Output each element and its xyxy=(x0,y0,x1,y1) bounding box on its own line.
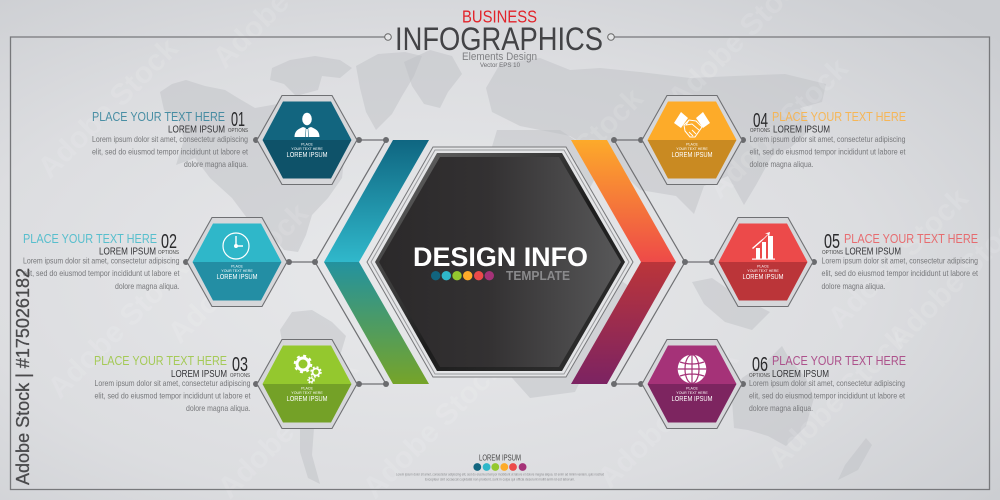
hexagon 03: LOREM IPSUM xyxy=(286,396,328,403)
text block 06 xyxy=(749,353,906,413)
text block 03: 03 xyxy=(232,354,248,376)
text block 05: 05 xyxy=(824,231,840,253)
title: vector note: Vector EPS 10 xyxy=(480,63,521,69)
title: infographics: INFOGRAPHICS xyxy=(395,21,603,57)
text block 02: Lorem ipsum dolor sit amet, consectetur adipiscing xyxy=(23,256,180,266)
text block 06: OPTIONS xyxy=(749,373,771,379)
central subheading: TEMPLATE xyxy=(506,269,570,283)
frame ornament: right ring xyxy=(608,34,614,40)
central heading: DESIGN INFO xyxy=(413,242,588,272)
text block 06: 06 xyxy=(752,354,768,376)
hexagon 02: LOREM IPSUM xyxy=(216,274,258,281)
text block 04: Lorem ipsum dolor sit amet, consectetur adipiscing xyxy=(750,135,906,144)
text block 03: dolore magna aliqua. xyxy=(186,404,250,413)
text block 04: LOREM IPSUM xyxy=(773,124,830,136)
text block 04: PLACE YOUR TEXT HERE xyxy=(772,109,906,124)
text block 01: PLACE YOUR TEXT HERE xyxy=(92,109,225,124)
text block 06: elit, sed do eiusmod tempor incididunt ut labore et xyxy=(749,392,906,400)
right chevron xyxy=(571,140,676,384)
text block 01 xyxy=(92,109,249,169)
text block 05: dolore magna aliqua. xyxy=(822,282,886,291)
footer text: Excepteur sint occaecat cupidatat non proident, sunt in culpa qui officia deserunt mollit anim id est laborum. xyxy=(425,478,575,482)
hexagon 03: PLACE xyxy=(301,386,313,390)
connector lines xyxy=(289,140,712,384)
text block 02: OPTIONS xyxy=(158,250,180,256)
hexagon 06 xyxy=(642,340,742,428)
text block 02: LOREM IPSUM xyxy=(99,246,156,258)
text block 04: elit, sed do eiusmod tempor incididunt ut labore et xyxy=(750,148,906,156)
text block 04 xyxy=(750,109,906,169)
text block 05: LOREM IPSUM xyxy=(845,246,901,258)
title: business: BUSINESS xyxy=(462,6,537,26)
icon: clock xyxy=(223,233,249,259)
connector dots xyxy=(183,137,817,387)
text block 02: PLACE YOUR TEXT HERE xyxy=(23,231,157,246)
text block 03: Lorem ipsum dolor sit amet, consectetur adipiscing xyxy=(94,379,251,388)
text block 02: elit, sed do eiusmod tempor incididunt ut labore et xyxy=(23,269,180,278)
text block 04: 04 xyxy=(753,110,768,132)
icon: globe xyxy=(678,355,706,383)
hexagon 01 xyxy=(257,96,357,184)
title xyxy=(395,6,603,69)
icon: bar chart xyxy=(752,232,775,260)
text block 04: dolore magna aliqua. xyxy=(750,160,814,169)
text block 06: PLACE YOUR TEXT HERE xyxy=(772,353,906,368)
watermarks: Adobe Stock xyxy=(32,32,185,185)
central colour dots xyxy=(431,271,494,280)
hexagon 02: YOUR TEXT HERE xyxy=(221,269,253,273)
footer xyxy=(396,454,604,482)
watermarks: Adobe Stock xyxy=(377,152,530,305)
hexagon 06: LOREM IPSUM xyxy=(672,396,713,403)
text block 06: Lorem ipsum dolor sit amet, consectetur adipiscing xyxy=(749,379,905,388)
text block 03: LOREM IPSUM xyxy=(171,369,227,380)
hexagon 03 xyxy=(257,340,357,428)
watermarks: Adobe Stock xyxy=(702,52,855,205)
hexagon 05: PLACE xyxy=(757,264,769,268)
text block 03: PLACE YOUR TEXT HERE xyxy=(94,353,227,368)
hexagon 04: PLACE xyxy=(686,142,698,146)
hexagon 02: PLACE xyxy=(231,264,243,268)
text block 05 xyxy=(822,231,979,291)
text block 01: LOREM IPSUM xyxy=(168,124,225,136)
hexagon 03: YOUR TEXT HERE xyxy=(291,391,323,395)
hexagon 01: LOREM IPSUM xyxy=(286,152,328,159)
hexagon 05 xyxy=(713,218,813,306)
text block 01: Lorem ipsum dolor sit amet, consectetur adipiscing xyxy=(92,135,248,144)
watermarks: Adobe Stock xyxy=(762,322,915,475)
text block 01: elit, sed do eiusmod tempor incididunt ut labore et xyxy=(92,148,249,156)
watermarks: Adobe Stock xyxy=(822,182,975,335)
stock id label: Adobe Stock | #175026182 xyxy=(13,268,33,485)
text block 03: OPTIONS xyxy=(230,373,251,379)
icon: gears xyxy=(295,356,321,383)
text block 01: dolore magna aliqua. xyxy=(184,160,248,169)
text block 01: 01 xyxy=(231,109,245,131)
text block 05: elit, sed do eiusmod tempor incididunt ut labore et xyxy=(822,269,979,278)
hexagon 05: LOREM IPSUM xyxy=(742,274,784,281)
text block 04: OPTIONS xyxy=(750,128,771,134)
text block 05: PLACE YOUR TEXT HERE xyxy=(844,231,978,246)
text block 02: 02 xyxy=(161,231,177,253)
hexagon 06: PLACE xyxy=(686,386,698,390)
icon: handshake xyxy=(674,112,710,137)
world map xyxy=(160,50,872,484)
hexagon 06: YOUR TEXT HERE xyxy=(676,391,708,395)
text block 03: elit, sed do eiusmod tempor incididunt ut labore et xyxy=(94,392,251,400)
text block 01: OPTIONS xyxy=(228,128,249,134)
central hexagon xyxy=(367,147,633,377)
hexagon 04: LOREM IPSUM xyxy=(672,152,713,159)
footer text: Lorem ipsum dolor sit amet, consectetur adipiscing elit, sed do eiusmod tempor incididunt ut labore et dolore magna aliqua. Ut enim ad minim veniam, quis nostrud xyxy=(396,472,604,476)
hexagon 01: PLACE xyxy=(301,142,313,146)
icon: businessman xyxy=(294,113,320,137)
hexagon 01: YOUR TEXT HERE xyxy=(291,147,323,151)
title: elements design: Elements Design xyxy=(462,51,537,63)
left chevron xyxy=(324,140,429,384)
watermarks: Adobe Stock xyxy=(162,197,315,350)
hexagon 02 xyxy=(187,218,287,306)
footer text xyxy=(396,472,604,482)
watermarks: Adobe Stock xyxy=(497,82,650,235)
frame ornament: left ring xyxy=(385,34,391,40)
hexagon 04 xyxy=(642,96,742,184)
footer heading: LOREM IPSUM xyxy=(479,454,521,462)
text block 06: LOREM IPSUM xyxy=(772,369,829,380)
hexagon 05: YOUR TEXT HERE xyxy=(747,269,779,273)
text block 02 xyxy=(23,231,180,291)
watermarks: Adobe Stock xyxy=(592,342,745,495)
text block 02: dolore magna aliqua. xyxy=(115,282,180,291)
hexagon 04: YOUR TEXT HERE xyxy=(676,147,708,151)
footer colour dots xyxy=(473,463,526,471)
text block 06: dolore magna aliqua. xyxy=(749,404,813,413)
text block 03 xyxy=(94,353,251,413)
watermarks: Adobe Stock xyxy=(42,252,195,405)
text block 05: OPTIONS xyxy=(822,250,844,256)
